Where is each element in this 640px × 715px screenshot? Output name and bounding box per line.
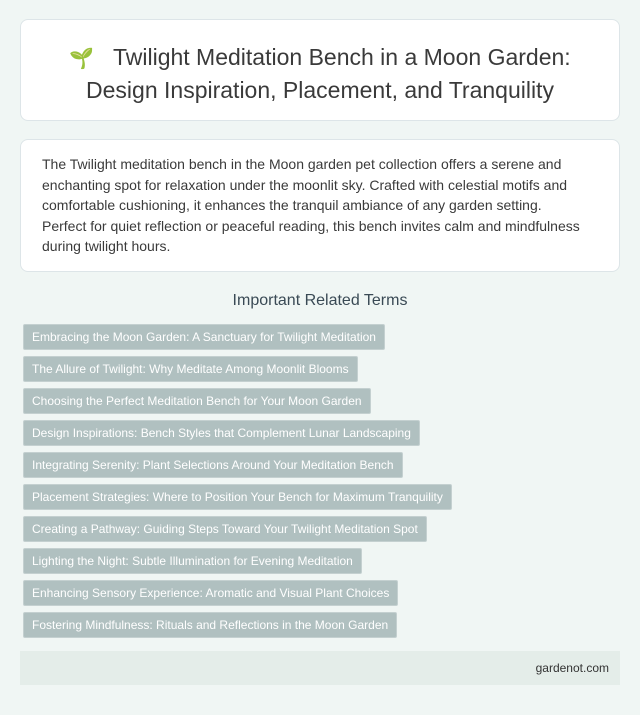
tag 1 xyxy=(23,324,385,350)
tag 7 xyxy=(23,516,427,542)
tag 10 xyxy=(23,612,397,638)
tag 2: The Allure of Twilight: Why Meditate Among Moonlit Blooms xyxy=(32,362,349,376)
tag 6 xyxy=(23,484,452,510)
title card xyxy=(20,19,620,121)
tag 3: Choosing the Perfect Meditation Bench for Your Moon Garden xyxy=(32,394,362,408)
description card xyxy=(20,139,620,272)
tag 6: Placement Strategies: Where to Position Your Bench for Maximum Tranquility xyxy=(32,490,443,504)
tag 8 xyxy=(23,548,362,574)
section heading: Important Related Terms xyxy=(233,292,407,309)
tag 2 xyxy=(23,356,358,382)
tag 1: Embracing the Moon Garden: A Sanctuary for Twilight Meditation xyxy=(32,330,376,344)
tag 10: Fostering Mindfulness: Rituals and Reflections in the Moon Garden xyxy=(32,618,388,632)
tag 8: Lighting the Night: Subtle Illumination for Evening Meditation xyxy=(32,554,353,568)
description text: The Twilight meditation bench in the Moon garden pet collection offers a serene and enchanting spot for relaxation under the moonlit sky. Crafted with celestial motifs and comfortable cushioning, it enhances the tranquil ambiance of any garden setting. Perfect for quiet reflection or peaceful reading, this bench invites calm and mindfulness during twilight hours. xyxy=(42,156,580,254)
title: 🌱 Twilight Meditation Bench in a Moon Garden: Design Inspiration, Placement, and Tranquility xyxy=(69,44,571,103)
tag 4 xyxy=(23,420,420,446)
tag 4: Design Inspirations: Bench Styles that Complement Lunar Landscaping xyxy=(32,426,411,440)
tag 5: Integrating Serenity: Plant Selections Around Your Meditation Bench xyxy=(32,458,394,472)
tag 7: Creating a Pathway: Guiding Steps Toward Your Twilight Meditation Spot xyxy=(32,522,418,536)
tag 9: Enhancing Sensory Experience: Aromatic and Visual Plant Choices xyxy=(32,586,389,600)
tag 3 xyxy=(23,388,371,414)
footer xyxy=(20,651,620,685)
tag 9 xyxy=(23,580,398,606)
footer source text: gardenot.com xyxy=(536,661,609,675)
tag 5 xyxy=(23,452,403,478)
